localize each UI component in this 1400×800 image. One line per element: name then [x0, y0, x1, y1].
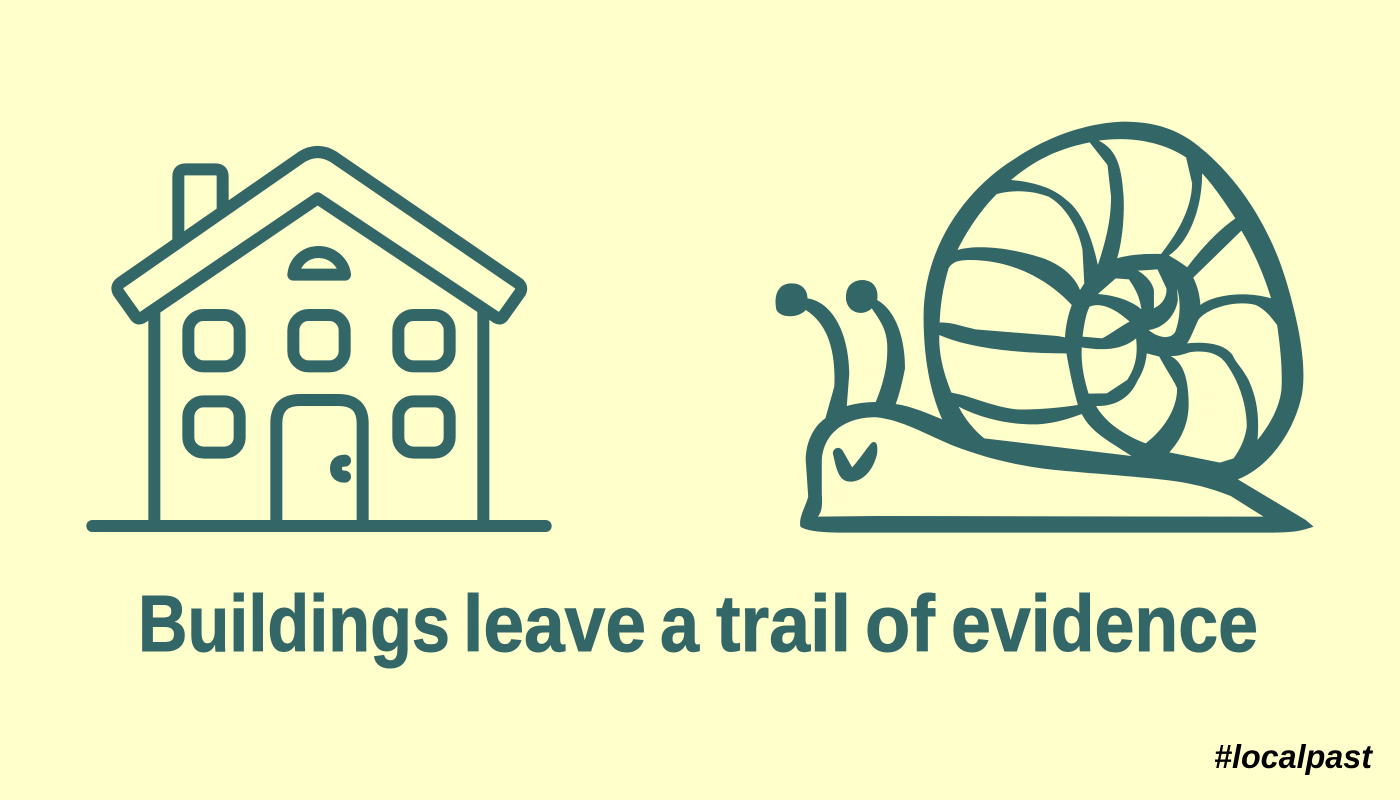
upper right window [398, 315, 450, 366]
upper middle window [293, 315, 345, 366]
heading: a [660, 579, 699, 668]
hashtag: #localpast [1214, 738, 1374, 775]
ground line [92, 508, 546, 544]
heading: Buildings [138, 579, 450, 668]
snail eye [833, 442, 877, 482]
heading: of [865, 579, 935, 668]
snail shell chambers [939, 139, 1282, 463]
heading: evidence [951, 579, 1258, 668]
icon: house [92, 152, 546, 526]
snail body interior [818, 417, 1264, 517]
house roof [117, 152, 521, 319]
heading: trail [716, 579, 851, 668]
house chimney [178, 169, 223, 240]
upper left window [188, 315, 240, 366]
icon: snail [776, 122, 1314, 533]
door knob [336, 461, 345, 477]
door [276, 400, 363, 523]
house walls [154, 312, 483, 523]
lower right window [398, 401, 450, 453]
heading: leave [463, 579, 646, 668]
lower left window [188, 401, 240, 453]
snail silhouette [776, 122, 1314, 533]
heading [138, 579, 1258, 668]
attic window [293, 252, 345, 275]
